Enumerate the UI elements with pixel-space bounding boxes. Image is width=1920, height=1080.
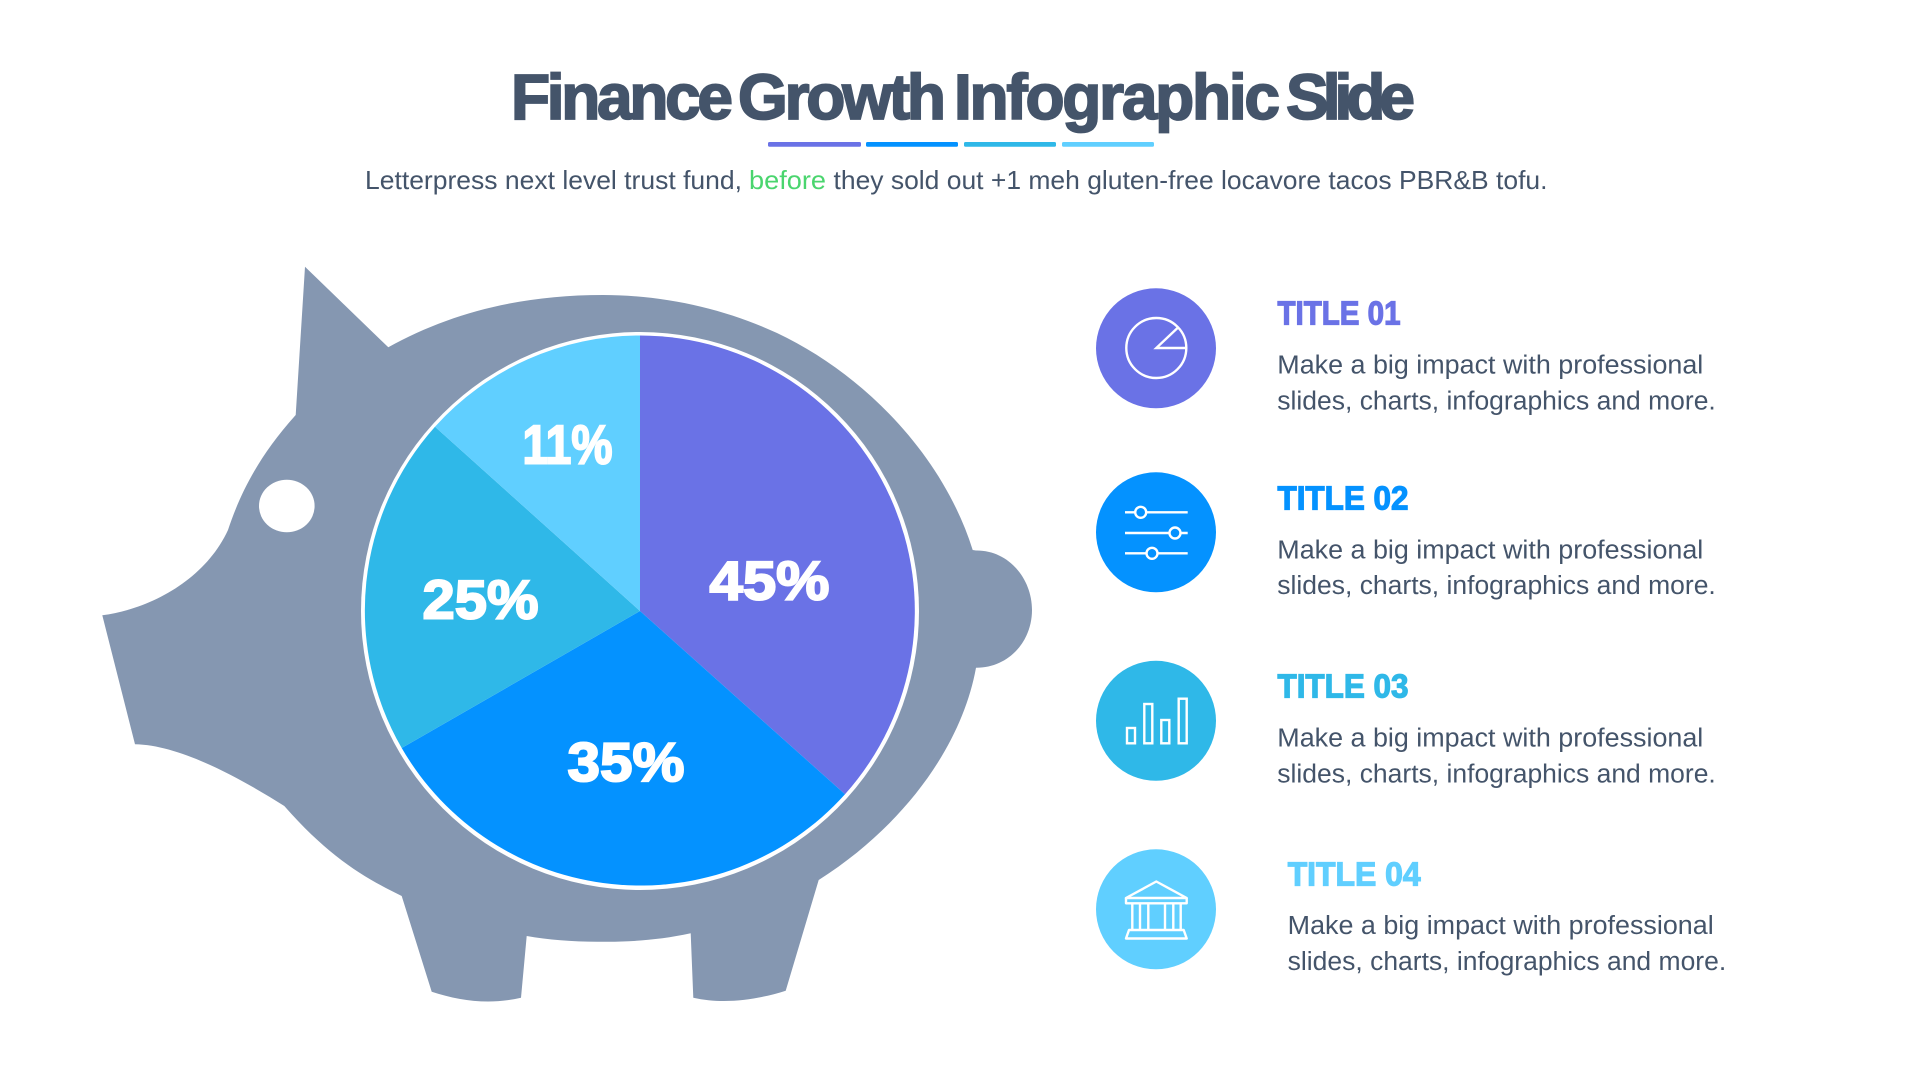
slice: 25% bbox=[365, 427, 640, 748]
title 04: TITLE 04 bbox=[1288, 855, 1421, 892]
title: Infographic bbox=[954, 61, 1280, 133]
piggy bank silhouette bbox=[102, 267, 1032, 1001]
description 02: slides, charts, infographics and more. bbox=[1277, 572, 1716, 600]
description 01: slides, charts, infographics and more. bbox=[1277, 387, 1716, 415]
subtitle: Letterpress next level trust fund, bbox=[365, 165, 742, 195]
description 01: Make a big impact with professional bbox=[1277, 351, 1703, 379]
title bbox=[511, 61, 1415, 133]
title: Slide bbox=[1286, 61, 1415, 133]
label 35%: 35% bbox=[568, 731, 684, 793]
subtitle: they sold out +1 meh gluten-free locavore tacos PBR&B tofu. bbox=[834, 165, 1548, 195]
label 11%: 11% bbox=[522, 414, 612, 476]
icon: bank on light blue circle bbox=[1096, 849, 1216, 969]
title 01: TITLE 01 bbox=[1278, 294, 1400, 332]
icon: sliders on blue circle bbox=[1096, 472, 1216, 592]
description 03: Make a big impact with professional bbox=[1277, 724, 1703, 752]
description 04: Make a big impact with professional bbox=[1288, 912, 1714, 940]
title 02: TITLE 02 bbox=[1278, 480, 1408, 516]
subtitle: before bbox=[749, 165, 826, 195]
item 04 bbox=[1096, 849, 1726, 976]
description 04: slides, charts, infographics and more. bbox=[1288, 948, 1726, 976]
pig eye bbox=[259, 480, 315, 532]
title 03: TITLE 03 bbox=[1278, 667, 1408, 704]
slice: 35% bbox=[402, 611, 845, 886]
item 03 bbox=[1096, 661, 1716, 788]
subtitle bbox=[365, 165, 1548, 195]
title accent bars bbox=[768, 142, 1154, 147]
description 03: slides, charts, infographics and more. bbox=[1277, 760, 1716, 788]
description 02: Make a big impact with professional bbox=[1277, 536, 1703, 564]
description 02 bbox=[1277, 536, 1716, 600]
description 04 bbox=[1288, 912, 1726, 976]
icon: bars on teal circle bbox=[1096, 661, 1216, 781]
description 03 bbox=[1277, 724, 1716, 788]
title: Finance bbox=[511, 61, 733, 133]
description 01 bbox=[1277, 351, 1716, 415]
label 45%: 45% bbox=[710, 550, 830, 612]
item 02 bbox=[1096, 472, 1716, 600]
label 25%: 25% bbox=[422, 568, 538, 630]
slice: 11% bbox=[435, 335, 640, 611]
pie chart bbox=[361, 332, 919, 890]
slice: 45% bbox=[640, 336, 915, 794]
item 01 bbox=[1096, 288, 1716, 415]
title: Growth bbox=[738, 61, 946, 133]
icon: pie on purple circle bbox=[1096, 288, 1216, 408]
